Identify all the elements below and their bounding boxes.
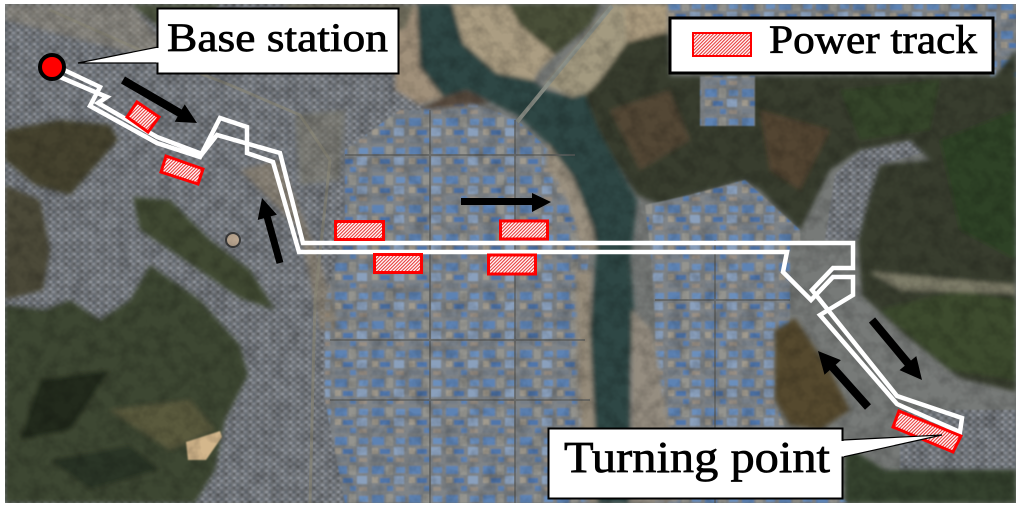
power track 6 bbox=[488, 255, 536, 274]
power track 5 bbox=[500, 221, 548, 239]
tan fields bbox=[5, 4, 156, 52]
sand patch bbox=[186, 431, 222, 460]
arrow: north-west segment bbox=[121, 76, 197, 123]
callout: turning point: Turning point bbox=[564, 433, 830, 482]
river banks bbox=[545, 143, 597, 250]
legend: power track bbox=[670, 17, 993, 73]
callout: base station bbox=[78, 8, 398, 74]
highway bbox=[50, 10, 330, 503]
mountain south west bbox=[5, 265, 248, 503]
stadium bbox=[226, 233, 240, 247]
industry patches north east bbox=[645, 76, 800, 245]
callout: base station: Base station bbox=[167, 15, 388, 60]
route: white double line bbox=[60, 69, 962, 432]
direction arrows bbox=[121, 76, 922, 410]
mountain top centre bbox=[508, 4, 600, 55]
callout: turning point bbox=[548, 428, 942, 498]
route track bbox=[60, 69, 962, 432]
arrow: down right bbox=[869, 317, 922, 380]
dam bridge bbox=[517, 6, 612, 122]
power track 4 bbox=[374, 254, 422, 272]
arrow: up bbox=[258, 198, 283, 264]
river bbox=[417, 4, 637, 503]
mountain west upper bbox=[5, 120, 118, 195]
legend swatch bbox=[693, 33, 751, 56]
base station marker bbox=[40, 55, 64, 79]
power track 7 bbox=[893, 411, 961, 452]
power track 1 bbox=[127, 102, 159, 132]
industrial district bbox=[325, 100, 590, 503]
power track 3 bbox=[336, 222, 384, 240]
legend: power track: Power track bbox=[769, 17, 977, 62]
power track 2 bbox=[161, 156, 203, 184]
arrow: centre right bbox=[461, 193, 551, 212]
industrial roads bbox=[330, 110, 790, 503]
arrow: up left bbox=[818, 351, 871, 410]
power tracks bbox=[127, 102, 961, 452]
mountain south east bbox=[841, 454, 1016, 503]
mountain north east bbox=[585, 32, 1016, 392]
mountain middle right bbox=[775, 318, 850, 430]
